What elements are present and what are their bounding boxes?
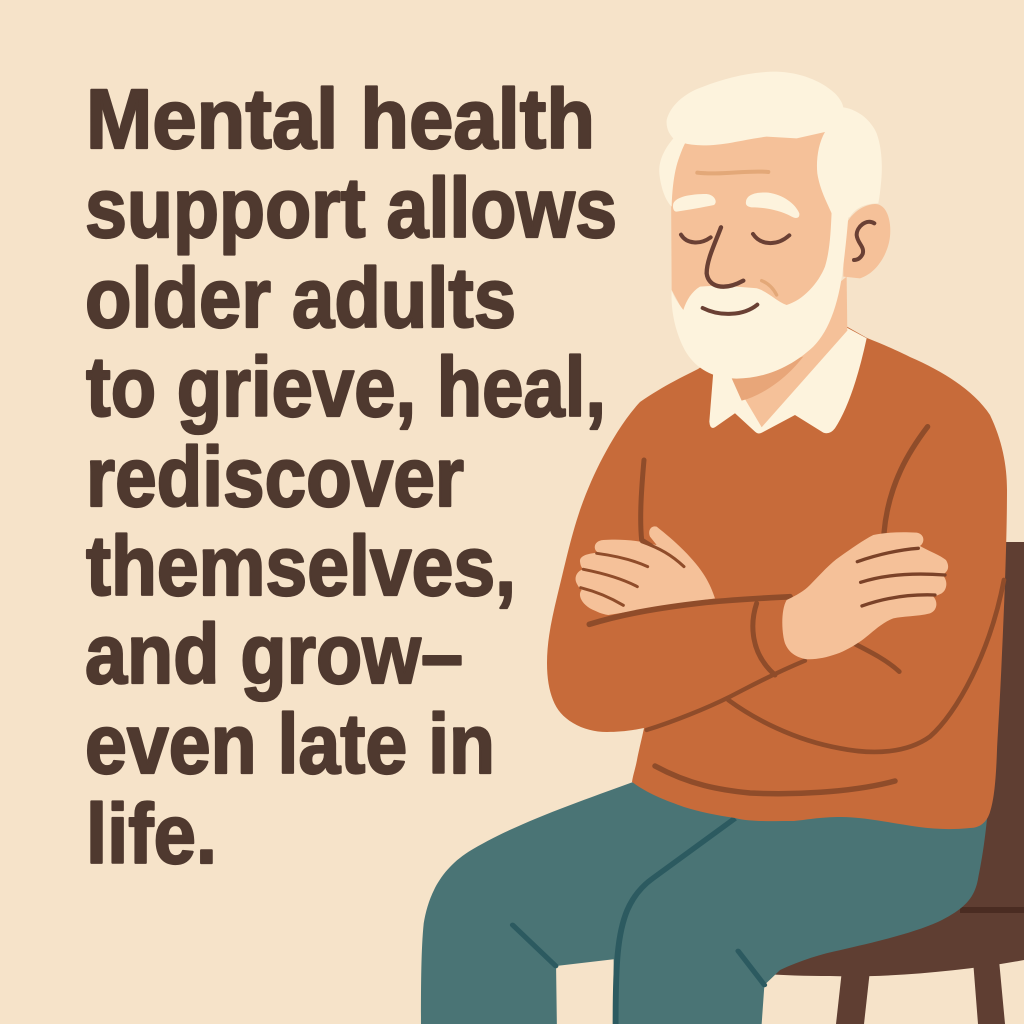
beard xyxy=(672,212,848,379)
collar and neck xyxy=(709,277,867,433)
face skin xyxy=(671,130,840,312)
head xyxy=(659,72,890,379)
title text block: rediscover xyxy=(86,430,464,524)
title text block: older adults xyxy=(85,251,516,345)
title text block: support allows xyxy=(85,161,617,255)
trousers xyxy=(421,770,989,1024)
chair xyxy=(725,542,1024,1024)
right hand xyxy=(782,532,948,659)
left hand xyxy=(576,526,715,615)
title text block: themselves, xyxy=(86,519,516,613)
title text block: life. xyxy=(86,787,217,881)
ear xyxy=(843,204,890,278)
eyebrows xyxy=(673,194,716,212)
title text block xyxy=(85,72,617,881)
arms and hands xyxy=(576,427,1004,752)
title text block: even late in xyxy=(85,697,495,791)
forearm line xyxy=(589,597,790,624)
hair xyxy=(659,72,882,218)
title text block: to grieve, heal, xyxy=(86,340,606,434)
title text block: and grow– xyxy=(85,607,463,701)
sleeve creases xyxy=(641,427,1004,752)
title text block: Mental health xyxy=(86,72,595,166)
forehead wrinkle xyxy=(697,172,768,173)
bottom hem crease xyxy=(655,766,895,794)
eyes, nose and mouth xyxy=(681,227,789,314)
cheek crease xyxy=(762,281,777,295)
sweater xyxy=(547,300,1007,829)
